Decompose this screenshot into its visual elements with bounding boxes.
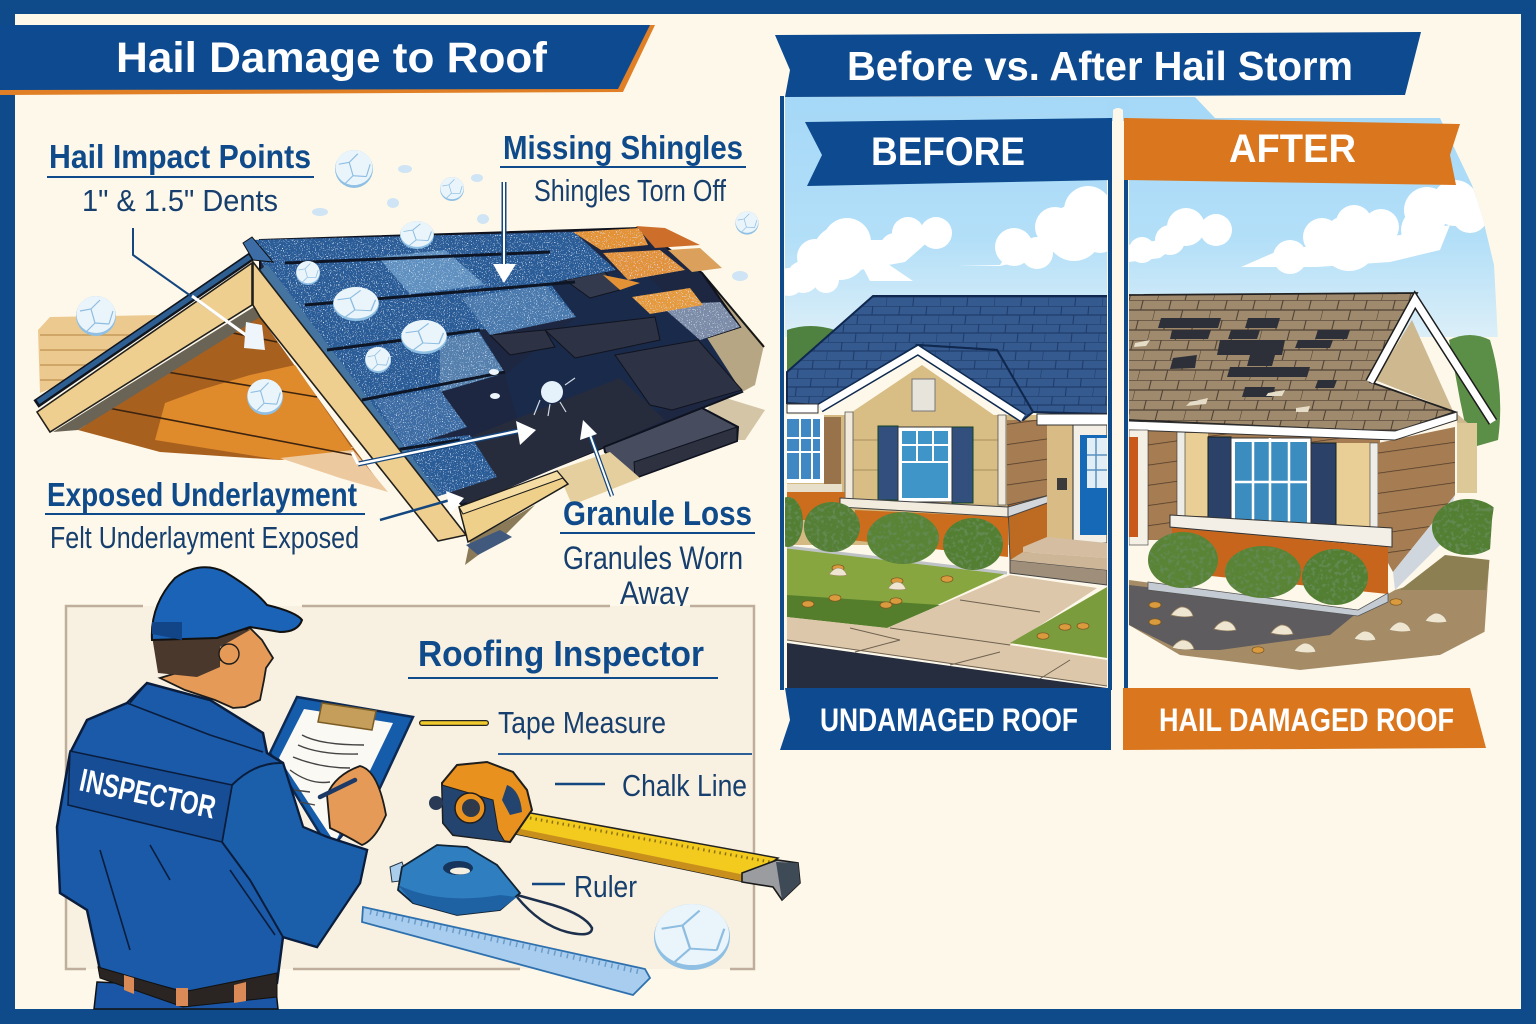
front window and shutters <box>878 426 973 503</box>
gable wall <box>852 365 994 415</box>
steps <box>1023 537 1107 558</box>
clipboard <box>270 697 413 850</box>
callout: granule loss <box>560 495 755 611</box>
blue granular shingles <box>250 232 616 497</box>
banner: hail damaged roof: HAIL DAMAGED ROOF <box>1159 702 1454 738</box>
gable rake boards <box>37 263 252 432</box>
banner: hail damaged roof <box>1123 688 1486 750</box>
callout: hail impact points: 1" & 1.5" Dents <box>82 183 278 218</box>
fascia <box>1128 412 1457 440</box>
label: ruler <box>532 869 637 904</box>
belt <box>98 967 277 1007</box>
walls <box>1148 430 1380 540</box>
arrow: missing shingles <box>493 182 516 283</box>
callout: exposed underlayment <box>45 476 365 555</box>
gable trim <box>1370 300 1493 422</box>
illustration: inspector <box>57 567 413 1009</box>
after scene <box>1128 97 1504 677</box>
label: chalk line: Chalk Line <box>622 768 747 803</box>
wood gable interior <box>78 317 385 490</box>
wood backdrop <box>38 315 160 393</box>
callout: granule loss: Granules Worn <box>563 540 743 576</box>
hailstones <box>76 150 759 415</box>
arrow: hail impact points <box>133 228 265 350</box>
heading: roofing inspector: Roofing Inspector <box>418 633 704 674</box>
icon: chalk line reel <box>390 845 592 934</box>
label: tape measure: Tape Measure <box>498 705 666 740</box>
back band with text <box>68 751 232 842</box>
sky <box>1129 97 1504 337</box>
roof damage highlights <box>1134 340 1310 412</box>
callout: hail impact points <box>47 138 314 218</box>
walkway <box>787 575 1107 686</box>
callout: missing shingles: Missing Shingles <box>503 129 743 166</box>
shrubs <box>773 497 1003 570</box>
ribbon: after <box>1124 118 1460 185</box>
dark underlayment base <box>260 228 742 505</box>
inspector box <box>66 606 754 969</box>
sill and brick base <box>1172 528 1388 594</box>
gable wall <box>1376 320 1468 423</box>
right lawn <box>1010 587 1107 658</box>
entry column <box>1047 494 1050 538</box>
heading: hail damage to roof: Hail Damage to Roof <box>116 34 548 82</box>
callout: missing shingles: Shingles Torn Off <box>534 173 726 208</box>
arrow: granule loss <box>580 420 612 496</box>
side base <box>1393 495 1455 590</box>
lifted slab <box>604 408 738 478</box>
fascia beam <box>459 471 568 542</box>
road <box>787 643 1107 688</box>
door <box>1129 430 1148 545</box>
callout: granule loss: Away <box>620 575 689 611</box>
before scene <box>773 97 1118 688</box>
orange shingles <box>573 228 648 250</box>
impact burst <box>541 381 563 403</box>
banner: undamaged roof: UNDAMAGED ROOF <box>820 702 1078 738</box>
callout: exposed underlayment: Exposed Underlayment <box>47 476 357 513</box>
tree <box>1449 335 1500 448</box>
heading: before vs after hail storm <box>775 32 1421 97</box>
tan underside at right <box>699 273 764 392</box>
fascia <box>1037 414 1108 425</box>
arrow: exposed underlayment upper <box>352 421 536 464</box>
back band with text: INSPECTOR <box>77 762 219 826</box>
callout: missing shingles <box>500 129 746 208</box>
clouds <box>1129 180 1488 274</box>
tree <box>787 326 835 372</box>
callout: hail impact points: Hail Impact Points <box>49 138 311 175</box>
hail debris <box>1149 599 1447 677</box>
panel: before vs after hail storm <box>773 32 1504 750</box>
banner: undamaged roof <box>780 688 1111 750</box>
roof <box>1128 293 1455 432</box>
sky <box>785 97 1107 337</box>
jacket <box>57 683 367 992</box>
grass <box>787 547 1007 628</box>
ground <box>1129 560 1490 670</box>
arrow: exposed underlayment lower <box>380 491 464 520</box>
main roof <box>787 296 1108 414</box>
heading: before vs after hail storm: Before vs. After Hail Storm <box>847 43 1353 89</box>
panel: roofing inspector <box>57 567 800 1009</box>
heading: hail damage to roof <box>0 25 655 95</box>
illustration: damaged roof section <box>36 226 765 565</box>
ribbon: before: BEFORE <box>871 130 1025 174</box>
house walls <box>787 415 1036 545</box>
missing shingle patches <box>1158 318 1350 397</box>
clouds <box>775 186 1118 296</box>
sky strip above ribbons <box>1105 97 1131 121</box>
neck and face <box>160 628 273 708</box>
icon: ruler <box>362 907 650 995</box>
entry door <box>1073 425 1107 543</box>
trousers <box>94 982 278 1009</box>
gable trim <box>820 350 1023 418</box>
front window and shutters <box>1208 437 1336 530</box>
panel: hail damage to roof <box>0 25 800 1009</box>
icon: large hailstone <box>654 904 730 970</box>
cap <box>152 567 302 640</box>
ribbon: after: AFTER <box>1229 127 1356 171</box>
hand with pen <box>327 766 386 845</box>
callout: exposed underlayment: Felt Underlayment Exposed <box>50 520 359 555</box>
divider posts <box>782 96 1126 690</box>
tan backing under eave <box>557 452 640 505</box>
hair <box>152 630 250 677</box>
grey shadow under left board <box>53 305 260 432</box>
ribbon: before <box>805 118 1112 186</box>
icon: tape measure <box>429 762 800 900</box>
scattered pebbles <box>802 565 1089 639</box>
left window <box>787 404 841 484</box>
callout: granule loss: Granule Loss <box>563 495 752 533</box>
label: ruler: Ruler <box>574 869 637 904</box>
shrubs <box>1148 499 1504 605</box>
brick base and sill <box>850 510 1008 557</box>
dark shingle patches <box>490 317 742 410</box>
vent <box>912 379 935 411</box>
